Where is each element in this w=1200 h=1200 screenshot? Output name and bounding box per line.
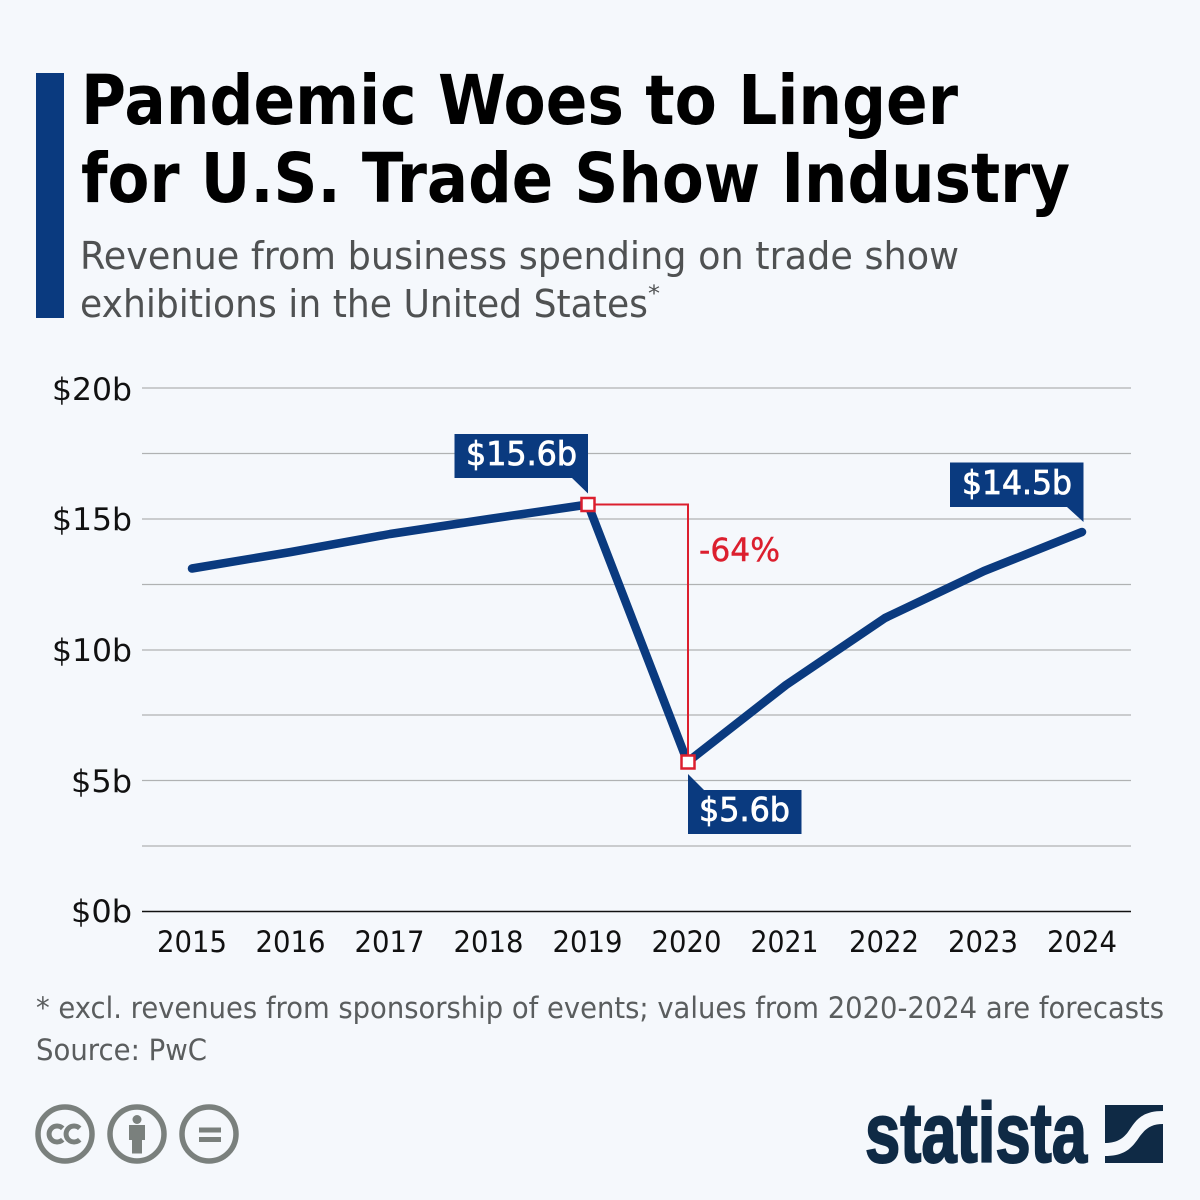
callout 2024 [950, 462, 1084, 522]
title accent bar [36, 73, 64, 318]
x axis labels: 2021 [750, 925, 818, 959]
x axis labels: 2015 [157, 925, 227, 959]
y axis labels [52, 372, 132, 930]
y axis labels: $5b [71, 764, 132, 800]
x axis labels: 2018 [454, 925, 524, 959]
x axis labels: 2022 [849, 925, 919, 959]
icon: no derivatives [182, 1107, 236, 1161]
subtitle: exhibitions in the United States [80, 282, 648, 326]
callout 2019: $15.6b [466, 434, 577, 473]
title: Pandemic Woes to Linger [81, 61, 958, 141]
callout 2020 [688, 774, 802, 834]
y axis labels: $0b [71, 894, 132, 930]
data line [192, 504, 1082, 762]
x axis labels: 2017 [354, 925, 424, 959]
x axis labels: 2023 [948, 925, 1018, 959]
x axis labels: 2024 [1047, 925, 1117, 959]
x axis labels: 2019 [552, 925, 622, 959]
callout 2020: $5.6b [699, 790, 790, 829]
footnote and source: Source: PwC [36, 1033, 207, 1067]
subtitle: * [648, 282, 660, 307]
marker 2019 [582, 498, 594, 511]
subtitle: Revenue from business spending on trade show [80, 234, 959, 278]
y axis labels: $20b [52, 372, 132, 408]
callout 2019 [454, 434, 588, 494]
statista logo: statista [865, 1086, 1088, 1180]
subtitle [80, 234, 959, 326]
footnote and source: * excl. revenues from sponsorship of events; values from 2020-2024 are forecasts [36, 991, 1164, 1025]
red drop bracket [588, 504, 688, 762]
title: for U.S. Trade Show Industry [81, 139, 1070, 219]
footnote and source [36, 991, 1164, 1067]
marker 2020 [682, 756, 694, 768]
title [81, 61, 1070, 219]
icon: attribution [110, 1107, 164, 1161]
callout 2024: $14.5b [962, 463, 1072, 502]
icon: creative commons [38, 1107, 92, 1161]
x axis labels [157, 925, 1117, 959]
x axis labels: 2016 [256, 925, 326, 959]
y axis labels: $15b [52, 502, 132, 538]
chart: revenue line chart [52, 372, 1131, 959]
change label: -64% [699, 531, 780, 569]
y axis labels: $10b [52, 633, 132, 669]
x axis labels: 2020 [652, 925, 722, 959]
